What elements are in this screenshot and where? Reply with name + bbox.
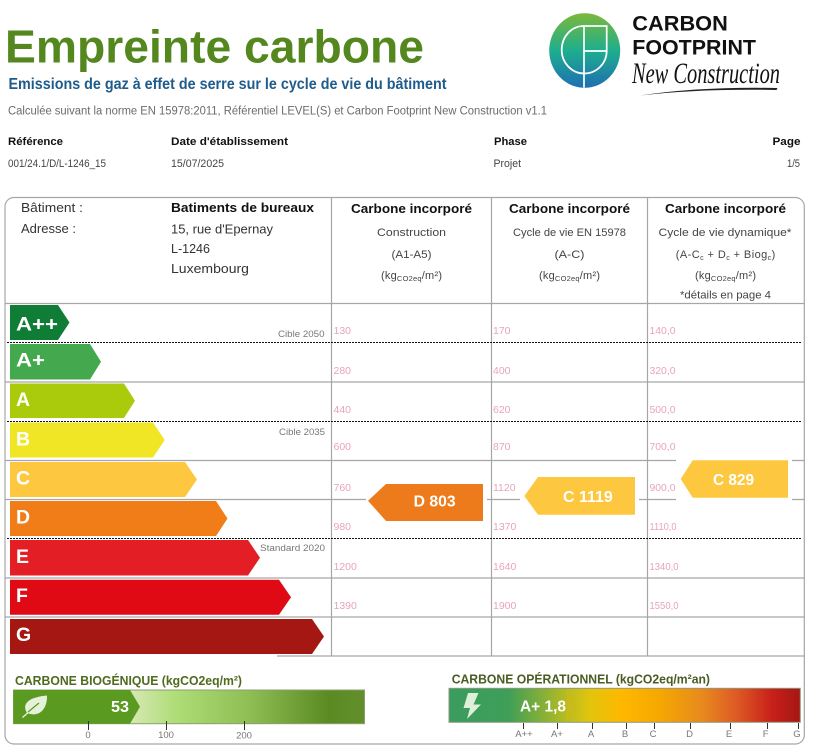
column header: life cycle: (A-C) xyxy=(554,249,584,261)
column header: life cycle: CO2eq xyxy=(555,274,580,283)
panel: biogenic carbon xyxy=(14,673,364,742)
thresholds: construction: 280 xyxy=(334,365,351,377)
arrow A++: A++ xyxy=(16,314,58,336)
title: Empreinte carbone xyxy=(5,20,424,72)
thresholds: life cycle: 1640 xyxy=(493,561,517,573)
value marker xyxy=(14,690,140,724)
subtitle: Emissions de gaz à effet de serre sur le cycle de vie du bâtiment xyxy=(8,76,446,93)
rating arrows xyxy=(10,305,324,654)
arrow D xyxy=(10,501,228,536)
target labels: Cible 2050 xyxy=(278,329,324,339)
icon: lightning bolt xyxy=(464,693,481,719)
metadata row: 1/5 xyxy=(787,158,800,170)
scale: B xyxy=(622,729,628,740)
building details: Bâtiment : xyxy=(21,201,83,215)
arrow A: A xyxy=(16,389,30,411)
column header: construction: CO2eq xyxy=(397,274,422,283)
logo wordmark: CARBON xyxy=(632,12,728,36)
column header: construction: /m²) xyxy=(422,270,442,282)
gradient bar xyxy=(14,690,364,724)
column header: dynamic life cycle: /m²) xyxy=(736,270,756,282)
column header: construction: Carbone incorporé xyxy=(351,202,472,216)
column header: dynamic life cycle: CO2eq xyxy=(711,274,736,283)
column header: dynamic life cycle: c xyxy=(700,255,704,262)
column header: dynamic life cycle: *détails en page 4 xyxy=(680,290,771,302)
metadata row xyxy=(8,136,800,170)
column header: life cycle: (kg xyxy=(539,270,555,282)
building details: Adresse : xyxy=(21,222,76,236)
heading: biogenic carbon: CARBONE BIOGÉNIQUE (kgCO2eq/m²) xyxy=(15,673,242,688)
value marker: 53 xyxy=(111,699,129,716)
column header: dynamic life cycle: c xyxy=(726,255,730,262)
heading: operational carbon: CARBONE OPÉRATIONNEL (kgCO2eq/m²an) xyxy=(452,672,710,686)
icon: logo circle xyxy=(549,13,620,88)
target labels: Cible 2035 xyxy=(279,427,325,437)
arrow F: F xyxy=(16,585,28,607)
building details: Batiments de bureaux xyxy=(171,200,315,215)
arrow G: G xyxy=(16,624,31,646)
scale xyxy=(515,723,801,740)
metadata row: Page xyxy=(772,136,800,148)
arrow A++ xyxy=(10,305,70,340)
scale: A+ xyxy=(551,729,563,740)
building details: 15, rue d'Epernay xyxy=(171,222,274,236)
norm note: Calculée suivant la norme EN 15978:2011, Référentiel LEVEL(S) et Carbon Footprint New Construction v1.1 xyxy=(8,106,547,118)
thresholds: construction: 130 xyxy=(334,325,351,337)
gradient bar xyxy=(449,688,800,722)
thresholds: life cycle: 1370 xyxy=(493,521,517,533)
thresholds: life cycle: 170 xyxy=(493,325,511,337)
column header: dynamic life cycle: (kg xyxy=(695,270,711,282)
column header: construction xyxy=(351,202,472,283)
scale: F xyxy=(763,729,769,740)
icon: leaf xyxy=(22,696,47,718)
building details xyxy=(21,200,315,276)
scale: 100 xyxy=(158,730,174,741)
thresholds: dynamic life cycle: 1110,0 xyxy=(650,521,677,533)
thresholds: dynamic life cycle: 500,0 xyxy=(650,404,676,416)
column header: life cycle: Cycle de vie EN 15978 xyxy=(513,227,626,239)
arrow C xyxy=(10,462,197,497)
logo wordmark: FOOTPRINT xyxy=(632,35,756,59)
column header: dynamic life cycle: ) xyxy=(772,249,775,261)
marker: D 803 xyxy=(368,484,483,521)
thresholds: construction: 760 xyxy=(334,482,351,494)
metadata row: Date d'établissement xyxy=(171,136,288,148)
arrow B xyxy=(10,422,165,458)
scale: G xyxy=(793,729,801,740)
scale: 200 xyxy=(236,730,252,742)
thresholds: dynamic life cycle: 900,0 xyxy=(650,482,676,494)
metadata row: Référence xyxy=(8,136,63,148)
scale: A xyxy=(588,729,595,740)
column header: dynamic life cycle xyxy=(658,202,792,302)
logo wordmark xyxy=(631,12,780,96)
arrow B: B xyxy=(16,429,30,451)
building details: L-1246 xyxy=(171,242,210,256)
thresholds: life cycle: 620 xyxy=(493,404,511,416)
panel: rating table frame and grid xyxy=(5,198,804,744)
panel: operational carbon xyxy=(449,672,801,740)
metadata row: Projet xyxy=(494,158,521,170)
column header: life cycle: Carbone incorporé xyxy=(509,202,630,216)
metadata row: Phase xyxy=(494,136,527,148)
column header: dynamic life cycle: (A-C xyxy=(676,249,700,261)
thresholds: dynamic life cycle: 140,0 xyxy=(650,325,676,337)
arrow D: D xyxy=(16,507,30,529)
arrow A xyxy=(10,384,135,418)
thresholds: dynamic life cycle: 1550,0 xyxy=(650,600,679,612)
column header: dynamic life cycle: Carbone incorporé xyxy=(665,202,786,216)
thresholds: construction: 600 xyxy=(334,441,351,453)
thresholds: dynamic life cycle: 320,0 xyxy=(650,365,676,377)
scale: E xyxy=(726,729,732,740)
metadata row: 15/07/2025 xyxy=(171,158,224,170)
arrow A+: A+ xyxy=(16,350,45,372)
arrow G xyxy=(10,619,324,654)
thresholds: dynamic life cycle xyxy=(650,325,679,612)
column header: dynamic life cycle: + Biog xyxy=(730,249,767,261)
marker: C 829: C 829 xyxy=(713,472,754,489)
column header: construction: Construction xyxy=(377,227,446,239)
thresholds: construction xyxy=(334,325,357,612)
arrow A+ xyxy=(10,344,101,380)
thresholds: life cycle: 1900 xyxy=(493,600,517,612)
scale: A++ xyxy=(515,729,533,740)
marker: C 1119 xyxy=(524,477,635,515)
thresholds: construction: 1200 xyxy=(334,561,357,573)
column header: life cycle: /m²) xyxy=(580,270,600,282)
arrow F xyxy=(10,580,291,615)
value marker: A+ 1,8 xyxy=(520,699,566,716)
column header: dynamic life cycle: c xyxy=(768,255,772,262)
thresholds: life cycle: 1120 xyxy=(493,482,516,494)
target labels xyxy=(260,329,325,553)
arrow E xyxy=(10,540,260,576)
column header: construction: (A1-A5) xyxy=(392,249,432,261)
thresholds: dynamic life cycle: 700,0 xyxy=(650,441,676,453)
thresholds: construction: 980 xyxy=(334,521,351,533)
scale: D xyxy=(686,729,693,740)
building details: Luxembourg xyxy=(171,262,249,276)
metadata row: 001/24.1/D/L-1246_15 xyxy=(8,158,106,170)
thresholds: construction: 440 xyxy=(334,404,351,416)
value marker xyxy=(520,689,577,722)
arrow C: C xyxy=(16,468,30,490)
logo: carbon footprint new construction xyxy=(549,12,780,96)
marker: D 803: D 803 xyxy=(414,494,456,511)
scale: 0 xyxy=(85,730,91,741)
marker: C 829 xyxy=(681,460,788,498)
thresholds: construction: 1390 xyxy=(334,600,357,612)
scale xyxy=(85,721,252,742)
thresholds: life cycle: 400 xyxy=(493,365,511,377)
column header: life cycle xyxy=(509,202,630,283)
thresholds: life cycle xyxy=(493,325,517,612)
column header: dynamic life cycle: + D xyxy=(704,249,726,261)
marker: C 1119: C 1119 xyxy=(563,489,613,506)
thresholds: life cycle: 870 xyxy=(493,441,511,453)
thresholds: dynamic life cycle: 1340,0 xyxy=(650,561,679,573)
column header: dynamic life cycle: Cycle de vie dynamique* xyxy=(658,227,792,239)
column header: construction: (kg xyxy=(381,270,397,282)
arrow E: E xyxy=(16,546,29,568)
target labels: Standard 2020 xyxy=(260,543,325,553)
scale: C xyxy=(650,729,657,740)
